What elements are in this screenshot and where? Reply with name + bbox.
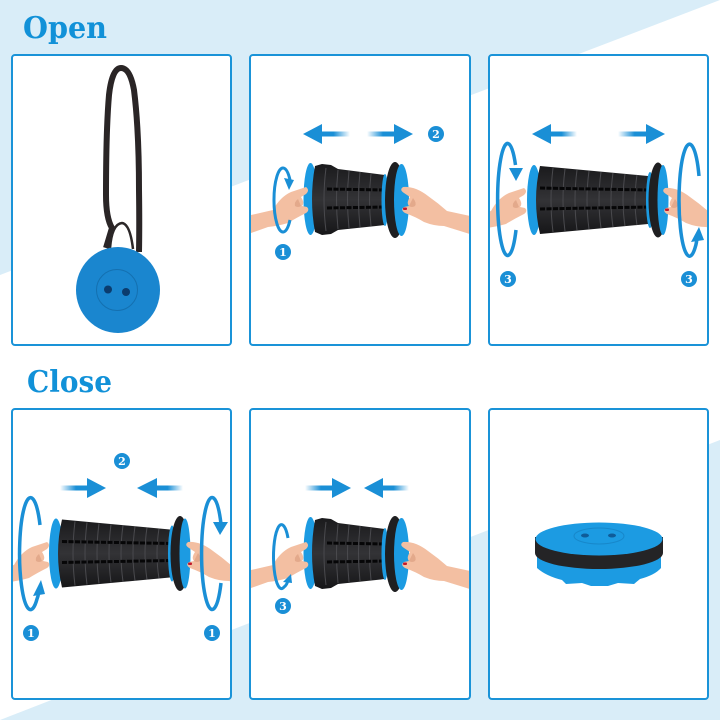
badge: 3 [275,598,291,614]
hands [13,542,230,582]
badge: 2 [428,126,444,142]
badge: 3: 3 [279,600,287,613]
badge: 2: 2 [432,128,440,141]
arrow: rotation [273,525,292,589]
badge: 3 left: 3 [504,273,512,286]
badge: 3 right: 3 [685,273,693,286]
icon: carry handle [110,223,133,249]
badge: 1 left [23,625,39,641]
panel: close step 1, long stool [11,408,232,700]
badge: 1 right [204,625,220,641]
hands [251,542,470,589]
arrow: push left [137,478,183,498]
stool: long, fully extended [49,516,190,591]
heading: Close: Close [27,365,112,400]
panel: close step 3, stool collapsed [489,409,708,699]
hands [251,187,470,234]
icon: collapsed stool [535,522,663,586]
arrow: right rotation [202,498,228,610]
stool: long, fully extended [527,162,668,238]
heading: Open: Open [23,11,107,46]
arrow: rotation [274,168,294,232]
panel: open step 1, stool hanging from strap [12,55,231,345]
badge: 1 left: 1 [27,627,35,640]
badge: 2: 2 [118,455,126,468]
panel: open step 3, long stool [488,54,709,346]
arrow: right rotation [679,144,704,256]
stool: short, extended slightly [304,162,409,238]
panel: open step 2, twist and pull short stool [250,55,470,345]
arrow: pull left [303,124,350,144]
arrow: push right [60,478,106,498]
arrow: pull right [367,124,413,144]
arrow: left rotation [498,143,523,255]
badge: 1: 1 [279,246,287,259]
stool: short [304,516,409,592]
arrow: push left [364,478,409,498]
icon: shoulder strap [106,68,139,252]
badge: 3 left [500,271,516,287]
arrow: pull left [532,124,577,144]
icon: closed stool disc [76,247,160,333]
arrow: push right [305,478,351,498]
badge: 1 right: 1 [208,627,216,640]
arrow: pull right [618,124,665,144]
badge: 3 right [681,271,697,287]
panel: close step 2, short stool [250,409,470,699]
badge: 2 [114,453,130,469]
hands [490,188,707,228]
badge: 1 [275,244,291,260]
arrow: left rotation [20,498,45,610]
